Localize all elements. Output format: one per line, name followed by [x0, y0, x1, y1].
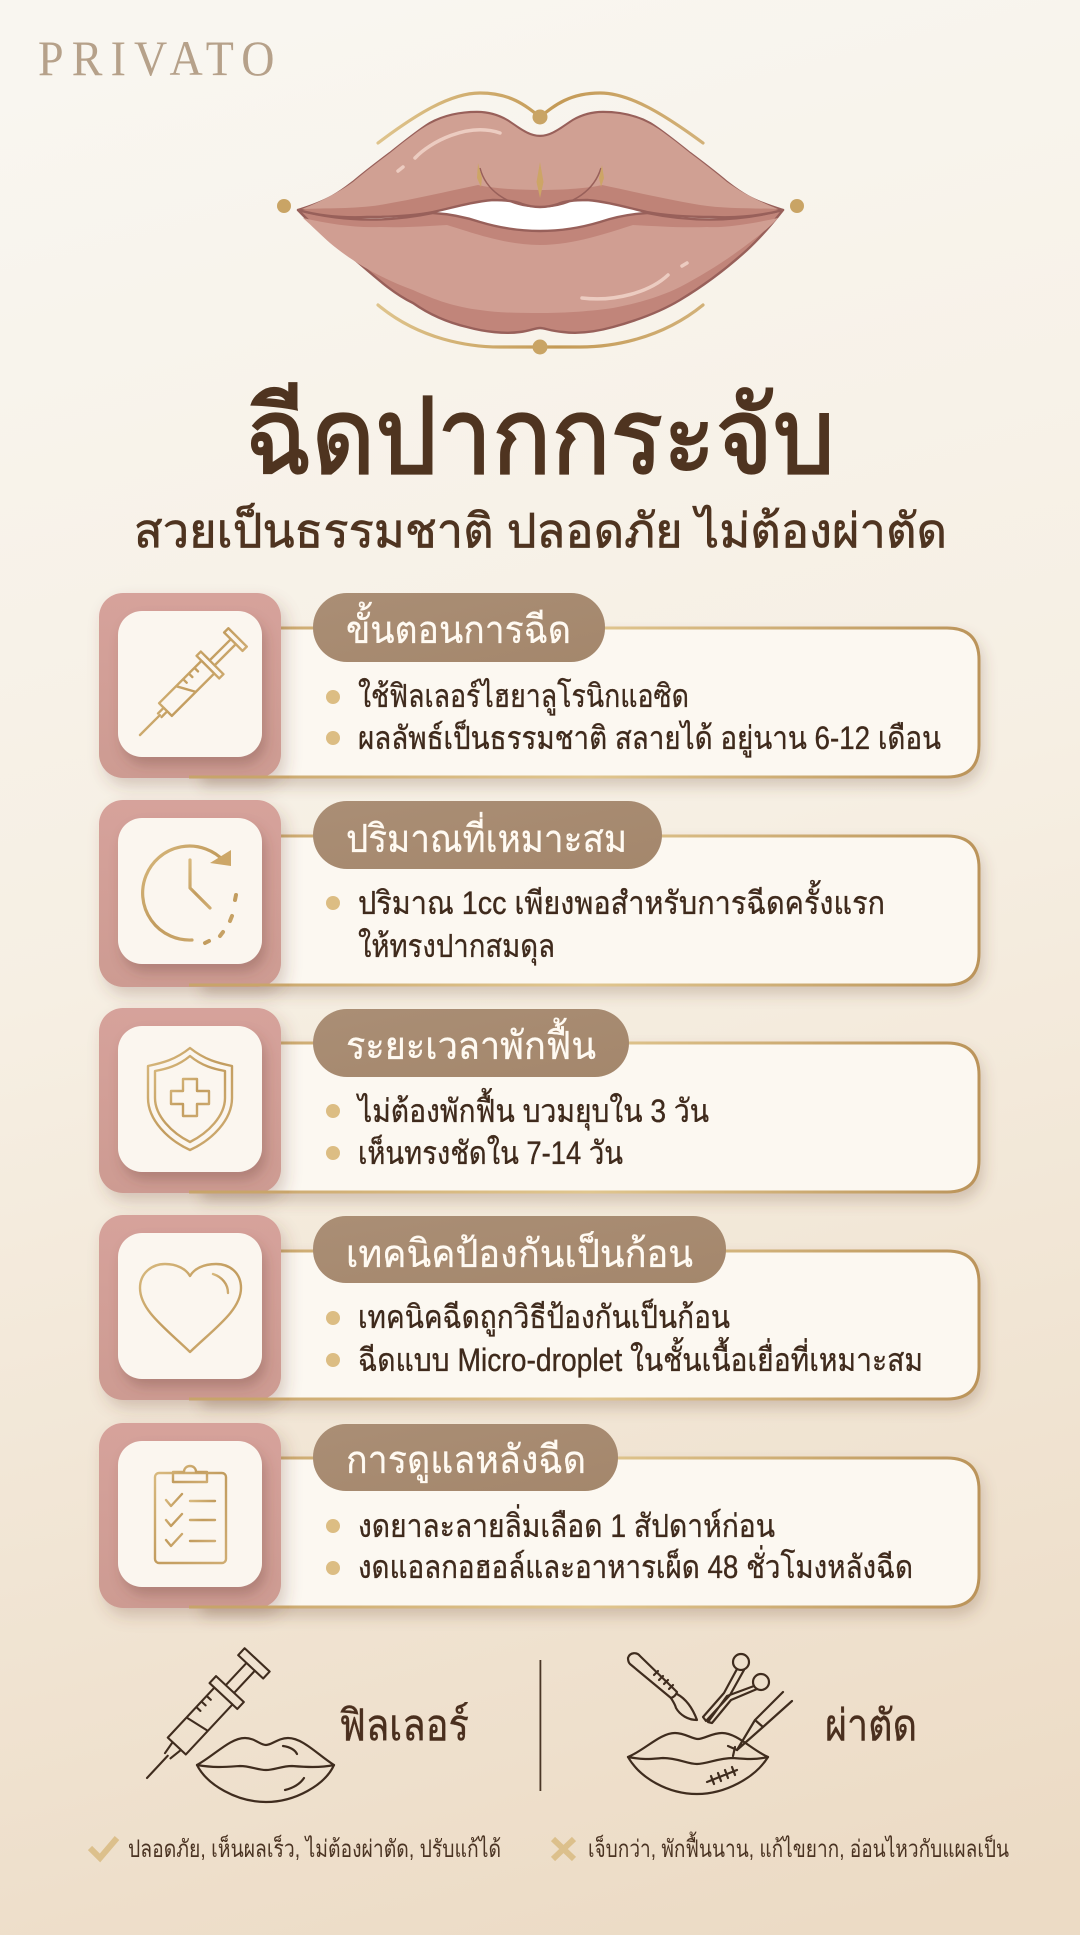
card [200, 836, 979, 985]
bullets [326, 1311, 340, 1325]
icon: shield [148, 1048, 232, 1150]
illustration: lips [277, 93, 804, 354]
lower lip [298, 210, 783, 333]
icon: surgical tools and lips [628, 1653, 792, 1794]
panel: การดูแลหลังฉีด: การดูแลหลังฉีด [346, 1439, 586, 1483]
gold dots [277, 110, 804, 354]
divider [540, 1660, 541, 1791]
icon tile [99, 800, 281, 987]
icon: cross [553, 1839, 574, 1859]
card [200, 1251, 979, 1399]
pill heading [313, 1424, 618, 1491]
comparison: filler [133, 1647, 469, 1802]
subtitle: สวยเป็นธรรมชาติ ปลอดภัย ไม่ต้องผ่าตัด [134, 502, 947, 557]
icon: syringe and lips [133, 1647, 334, 1802]
panel: ระยะเวลาพักฟื้น [99, 1008, 979, 1194]
logo: PRIVATO: PRIVATO [38, 31, 274, 86]
label: ผ่าตัด [825, 1702, 917, 1750]
panel: ขั้นตอนการฉีด [99, 593, 979, 778]
card [200, 628, 979, 777]
panel: ขั้นตอนการฉีด: ผลลัพธ์เป็นธรรมชาติ สลายได้ อยู่นาน 6-12 เดือน [358, 719, 941, 758]
panel: ปริมาณที่เหมาะสม: ปริมาณที่เหมาะสม [346, 812, 627, 861]
title: ฉีดปากกระจับ [245, 378, 835, 496]
bullet text [326, 896, 340, 910]
pill heading [313, 1009, 629, 1077]
icon: clipboard [155, 1466, 226, 1563]
panel: เทคนิคป้องกันเป็นก้อน: เทคนิคป้องกันเป็นก้อน [346, 1230, 693, 1276]
icon: clock [143, 846, 236, 943]
panel: ปริมาณที่เหมาะสม [99, 800, 979, 987]
cupid bow line [480, 168, 601, 207]
comparison: surgery [628, 1653, 917, 1794]
icon: syringe [129, 626, 249, 746]
icon tile [99, 593, 281, 778]
panel: ระยะเวลาพักฟื้น: ระยะเวลาพักฟื้น [346, 1017, 596, 1068]
panel: ขั้นตอนการฉีด: ขั้นตอนการฉีด [346, 601, 571, 652]
panel: การดูแลหลังฉีด: งดแอลกอฮอล์และอาหารเผ็ด 48 ชั่วโมงหลังฉีด [358, 1545, 913, 1585]
panel: เทคนิคป้องกันเป็นก้อน: ฉีดแบบ Micro-droplet ในชั้นเนื้อเยื่อที่เหมาะสม [358, 1337, 923, 1378]
icon: heart [140, 1264, 241, 1352]
pill heading [313, 593, 605, 662]
bullets [326, 690, 340, 704]
cons: cross and text [553, 1831, 1009, 1863]
icon: check [90, 1838, 117, 1858]
panel: ขั้นตอนการฉีด: ใช้ฟิลเลอร์ไฮยาลูโรนิกแอซิด [358, 678, 689, 716]
pill heading [313, 801, 662, 869]
bullets [326, 1104, 340, 1118]
panel: การดูแลหลังฉีด: งดยาละลายลิ่มเลือด 1 สัปดาห์ก่อน [358, 1504, 775, 1544]
gold arcs [378, 93, 703, 347]
lip highlights [398, 130, 687, 299]
lower lip light area [303, 218, 778, 313]
panel: ปริมาณที่เหมาะสม: ให้ทรงปากสมดุล [358, 928, 555, 966]
gold needle marks [477, 162, 604, 198]
panel: ระยะเวลาพักฟื้น: ไม่ต้องพักฟื้น บวมยุบใน 3 วัน [355, 1088, 709, 1131]
pros: check and text: ปลอดภัย, เห็นผลเร็ว, ไม่ต้องผ่าตัด, ปรับแก้ได้ [128, 1834, 501, 1863]
upper lip light area [302, 113, 778, 209]
card [200, 1458, 979, 1607]
pill heading [313, 1216, 726, 1283]
card [200, 1043, 979, 1192]
icon tile [99, 1008, 281, 1193]
icon tile [99, 1215, 281, 1400]
bullets [326, 1519, 340, 1533]
panel: เทคนิคป้องกันเป็นก้อน [99, 1215, 979, 1400]
panel: การดูแลหลังฉีด [99, 1423, 979, 1608]
panel: ระยะเวลาพักฟื้น: เห็นทรงชัดใน 7-14 วัน [358, 1134, 623, 1171]
panel: เทคนิคป้องกันเป็นก้อน: เทคนิคฉีดถูกวิธีป้องกันเป็นก้อน [358, 1298, 730, 1337]
label: ฟิลเลอร์ [339, 1702, 469, 1750]
upper lip base [298, 112, 783, 217]
panel: ปริมาณที่เหมาะสม: ปริมาณ 1cc เพียงพอสำหรับการฉีดครั้งแรก [358, 880, 885, 921]
icon tile [99, 1423, 281, 1608]
mouth opening [433, 200, 647, 231]
